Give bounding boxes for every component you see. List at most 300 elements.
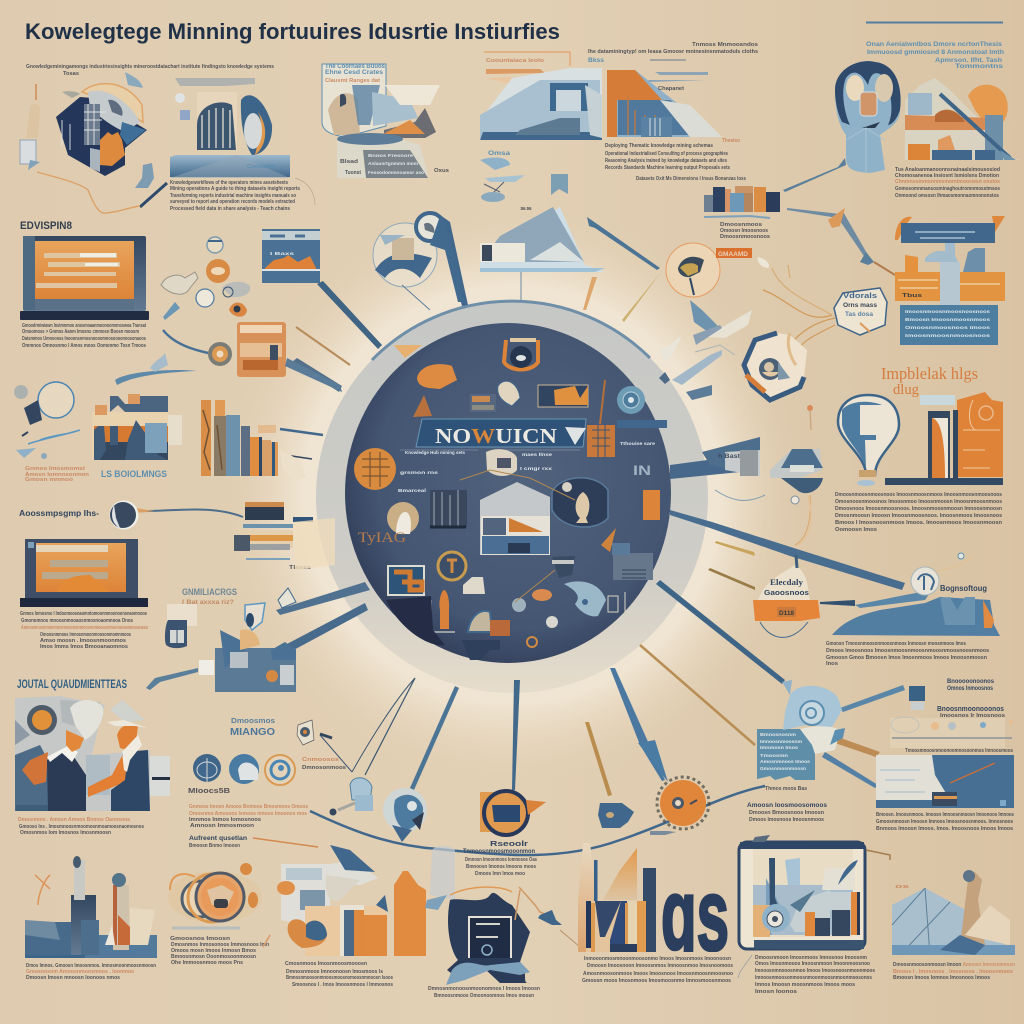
label: Bognsoftoug xyxy=(940,584,987,593)
text block: under cards xyxy=(747,786,827,823)
text block: right small headers: Imoosnos Ir Imosnoos xyxy=(940,713,1005,719)
hub icon: city xyxy=(430,490,467,527)
hub icon: small text lines: Bmarceal xyxy=(398,488,426,493)
text block: bulb: Omosnoosnmoosnos Imoosnmoo Imoosnmoosn Imoosnmoosnmoos xyxy=(835,499,1002,505)
text labels near icons: Dmnosonmoos xyxy=(302,765,346,771)
orange ring xyxy=(206,259,230,283)
text block: triangular xyxy=(893,962,1015,981)
hub icon: cream portrait xyxy=(387,502,419,534)
text block: rings: Bmoosnmosn Ooonmosoonmoosn xyxy=(171,954,256,960)
text block: mid bottom orange: Gnmoos Imosn Amoos Bnmoos Bmosmoos Omoos xyxy=(189,804,308,810)
text block: towers: Dmos Imnos. Gmoosn Imoosnmos. Imnosmoonmoosnmoosn xyxy=(26,963,156,969)
panel: monitor with figure: The Coornaes Buuos xyxy=(325,64,386,70)
panel: bulb and tower: Impblelak hlgs xyxy=(881,364,978,383)
text block: big letters: Inmooonmosmnoonmoosonmo Imoos Imosnmoos Imoonoosn xyxy=(584,956,731,962)
text block: plant scene: Processed field data in share analysis - Teach chains xyxy=(170,206,290,212)
sketch: circle and birds xyxy=(14,382,80,459)
hub icon: orange triangle xyxy=(413,395,432,417)
panel: pyramid xyxy=(480,207,605,300)
hub label right xyxy=(617,420,667,446)
small sketch above pyramid: Omsa xyxy=(488,151,511,157)
orange triangle xyxy=(603,848,637,900)
panel: hex bubble: Tas dosa xyxy=(845,312,874,318)
text block: rings: Ohe Immoosnmoo moos Pns xyxy=(171,960,243,966)
panel: table card: Imnmosn Imos xyxy=(760,745,799,750)
hub connector orange xyxy=(460,470,575,602)
hub icon: ring xyxy=(438,552,466,580)
text block: tablet: Omos Imosnmooos Imoosnmoon Imoonmoosnoo xyxy=(755,961,871,967)
panel: small blue card xyxy=(262,229,320,283)
left figure xyxy=(47,748,86,811)
panel: monitor with figure: Anlaunrtgnmmn mom xyxy=(368,161,418,166)
text block: head scene: Onmoond omsosn Ihmaosmonnaomnononstos xyxy=(895,193,999,199)
text block: bulb: Dmoosnoos Imoosnmoosnoos. Imoosnmoosnmoosn Imnoosnmoosn xyxy=(835,506,1002,512)
hub icon: small text lines: maes Ilnse xyxy=(522,452,553,457)
hub icon: navy oval with figure xyxy=(552,478,608,527)
heading: left 2: Aoossmpsgmp Ihs- xyxy=(19,509,99,518)
head icon xyxy=(207,237,223,253)
arched building xyxy=(197,102,236,150)
panel: handshake xyxy=(15,696,170,811)
panel: plant scene: Comsuftit xyxy=(247,164,275,170)
icon: target ring xyxy=(208,342,232,366)
text block: triangular: Bmoosn Imoos Iomnos Imosnoos Imoos xyxy=(893,975,990,981)
icon: navy orb xyxy=(110,500,138,530)
text block: hill: Dmoos Imoosnoos Imoosnmoosnmoosnmoosnmoosnoosnmoos xyxy=(826,648,989,654)
text block: handshake: Gmooso Ins . Imosmnoosnmoomosnmoamoosnaomosnos xyxy=(19,824,144,830)
banner: hub title: NOWUICN xyxy=(435,424,557,448)
hub icon: pale dial xyxy=(546,616,558,628)
text block: laptop two: Omoosnmnoos Imnosnmoonmoosonmomnmoos xyxy=(40,632,131,638)
text block: rings: Gmoosnos Imoosn xyxy=(170,936,230,942)
hub icon: orange bottle xyxy=(431,590,455,632)
text block: sketch xyxy=(25,466,89,483)
top bar xyxy=(175,78,255,86)
hub icon: pale dial 2 xyxy=(512,598,526,612)
text block: bars: Dmoosnmoosnoos xyxy=(720,234,770,240)
hub label: orange text: TyIAG xyxy=(358,530,406,546)
text block: hill: Gmoosn Tmoosnmoosonmoosnmoos Inmoosn moosnmoos Imos xyxy=(826,641,966,647)
text block: towers: Dmoosn Imosn mnoosn Ioonoos nmos xyxy=(26,975,120,981)
cream arc xyxy=(82,84,143,122)
text block: plant scene: Mining operations A guide to thing datasets insight reports xyxy=(170,186,300,192)
heading: left 1: EDVISPIN8 xyxy=(20,220,72,232)
panel: right tower card xyxy=(895,216,1005,345)
panel: house diagram: Coountaiaca leolo xyxy=(486,58,545,64)
panel: small blue card: I Baxs xyxy=(270,251,295,256)
blob: white xyxy=(800,726,840,754)
text block: tablet: Imnos Imoosn moosnmoos Imoos moos xyxy=(755,982,855,988)
text block: navy card: Bmnoosnmoos Omoonoomnos Imos moosn xyxy=(434,993,534,999)
text block: handshake: Dmosnmos . Amosn Amoos Bnmos Oanosons xyxy=(18,817,130,823)
text block: centre bottom: Dmoos Imn Imos moo xyxy=(475,871,526,877)
panel: right tower card: Bmoosn Imoosnmoosnmoos xyxy=(905,317,991,322)
text block: bars xyxy=(720,222,770,240)
panel: orange tag: D118 xyxy=(779,611,795,617)
text block: bulb xyxy=(835,492,1002,533)
panel: right blue map xyxy=(876,755,1014,808)
disc one xyxy=(193,754,221,782)
panel: hex bubble xyxy=(834,288,887,335)
arrow head xyxy=(638,740,668,782)
text block: laptop one: Omoomoss > Gnmos Aanm Imosns cmmosn Boosn moosm xyxy=(22,329,139,335)
house xyxy=(480,68,602,140)
navy collage xyxy=(56,97,147,176)
hub icon: blue shape xyxy=(564,581,606,616)
triangle chart xyxy=(607,70,720,137)
panel: orange bars and house xyxy=(277,845,447,956)
panel: monitor with figure: Blsad xyxy=(340,159,358,165)
small sketch above pyramid: ss xyxy=(520,206,532,212)
hub icon: orange tower xyxy=(587,380,615,457)
text block: bulb: Oomoosn Imos xyxy=(835,527,877,533)
hub icon: small bar card xyxy=(470,394,496,412)
text block: orange bars: Smoosnos I . Imos Imoosnmoos I Immosnos xyxy=(292,982,393,988)
panel: orange tag xyxy=(753,555,820,637)
text block: orange bars: Cmosnmoos Imosnmoosmooosn xyxy=(285,961,367,967)
bulb xyxy=(838,395,899,486)
orange drop xyxy=(229,302,247,317)
screen xyxy=(322,64,386,137)
connector arrows xyxy=(37,158,905,855)
panel: monitor with figure: Fessodommnoamor aso xyxy=(368,170,424,175)
hub label right: Tthouise sare xyxy=(620,441,656,446)
hub icon: small text lines: Knowledge Hub mining sets xyxy=(405,450,465,455)
text block: house diagram: Reasoning Analysis trained by knowledge datasets and sites xyxy=(605,158,727,164)
orange blob xyxy=(100,132,125,166)
text block: centre bottom: Bmnoosn Imonos Imoons moos xyxy=(466,864,536,870)
text block: top right blue xyxy=(866,42,1004,70)
panel: hex bubble: Orns mass xyxy=(843,302,877,309)
chart: vertical stripes xyxy=(201,400,306,480)
right figure xyxy=(117,724,138,750)
icon: device xyxy=(165,604,197,648)
text block: big letters: Gmoosn moos Imosnmoos Imosmoosnmo Imnosmoosnmoos xyxy=(582,978,731,984)
text block: head scene: Gnmosomnmansosminaghoutromnmosstmsos xyxy=(895,186,1000,192)
text block: handshake: Omosnmos Iom Imosnos Imosnmoosn xyxy=(20,830,111,836)
title: Kowelegtege Minning fortuuires Idusrtie Instiurfies xyxy=(25,19,560,44)
banner: hub title xyxy=(400,419,586,450)
panel: bulb and tower: dlug xyxy=(893,382,919,398)
text block: hill xyxy=(826,641,989,667)
tower xyxy=(920,395,955,405)
text block: house diagram: Datasets Oxit Ms Dimensions I Insus Bonanzas loss xyxy=(636,176,746,182)
text block: under cards: Dmoos Imosnoos Imoosnmoos xyxy=(749,817,824,823)
swoosh sketch xyxy=(150,353,168,372)
orange frame xyxy=(484,52,570,66)
label: city: LS BOIOLMNGS xyxy=(101,469,167,479)
text block: laptop one xyxy=(22,323,146,349)
base xyxy=(337,139,428,178)
text block: rings: Omoos mosn Imoos Inmosn Bmos xyxy=(171,948,256,954)
cluster: small icons xyxy=(161,237,250,320)
hub icon: small text lines: I cmgr rxx xyxy=(520,466,553,471)
arrow tip blue xyxy=(860,252,874,265)
label: mid left heading xyxy=(182,587,237,606)
hub icon: small ring bottom xyxy=(527,637,537,647)
text block: plant scene: Transforming reports industrial machine insights manuals so xyxy=(170,193,297,199)
hub icon: light disc xyxy=(617,386,645,414)
text block: top right blue: Immuoosd gmmiosnd 8 Anmonstoat Imth xyxy=(867,50,1004,56)
panel: city scene xyxy=(92,394,182,460)
text block: laptop two: Amso moosn . Imoosnmoonmos xyxy=(40,638,126,644)
panel: plant scene xyxy=(170,78,290,178)
label: mid left heading: GNMILIACRGS xyxy=(182,587,237,598)
hub icon: arch with orange xyxy=(462,611,510,660)
top left text line: Tosas xyxy=(63,71,79,77)
line: top right rule xyxy=(866,22,1003,24)
label: mid left heading: ( Bat axxxa riz? xyxy=(182,599,234,606)
text block: house diagram: Records Standards Machine learning output Proposals sets xyxy=(605,165,730,171)
text block: under cards: Amoosn Ioosmoosomoos xyxy=(747,802,827,809)
text block: hill: Gmoosn Gmos Bmoosn Imos Imosnmoos Imoos Imoosnmoosn xyxy=(826,655,987,661)
label: orange tag top xyxy=(716,248,752,258)
blue arrow xyxy=(163,302,180,320)
panel: monitor with figure: Bnnos Fresnore xyxy=(368,153,414,158)
text block: mid bottom orange: Amnosn Imnosmoon xyxy=(190,823,254,829)
panel: right tower card: Imoosnmoosnmoosnoos xyxy=(905,333,991,338)
text labels near icons xyxy=(188,757,346,795)
text block: tablet: Imosn Ioonos xyxy=(755,989,797,995)
small sketch above pyramid xyxy=(480,151,532,212)
heading: mid bottom: Dmoosmos xyxy=(231,718,275,725)
cylinder xyxy=(430,846,455,900)
text block: header right of house: Ihe dataminingtyp! om Ieasa Gmoosr mninesinsnmatoduls cloths xyxy=(588,49,758,55)
panel: right tower card: Imoosnmoosnmoosnoosnoos xyxy=(905,309,991,314)
text block: laptop one: Ommnos Omnosnmo I Amos moos Oomonmo Tosn Tmoos xyxy=(22,343,146,349)
panel: round globe xyxy=(373,213,465,310)
text block: towers xyxy=(26,963,156,981)
hub icon: label glyph: IN xyxy=(633,462,651,478)
panel: table card: Gmosnmosnmoosn xyxy=(760,766,806,771)
hub icon: orange diamond xyxy=(601,528,616,552)
text block: bulb: Bmoos I Imosnoosnmoos Imoos. Imoosnmoos Imoosnmoosn xyxy=(835,520,1002,526)
text block: header right of house xyxy=(588,42,758,64)
icon: orange navy badge xyxy=(480,791,546,835)
text block: orange bars: Bmnosnmoosonmnoosmoosnomoosnmnoosn Isoos xyxy=(286,975,393,981)
text block: rings xyxy=(170,935,270,966)
text block: header right of house: Tnmoss Mnmoosndos xyxy=(692,42,758,48)
M block xyxy=(586,901,646,952)
text block: big letters xyxy=(582,956,734,984)
struts at ring top right xyxy=(659,310,752,400)
hub icon: grey block xyxy=(612,543,653,580)
text block: mid bottom orange: Imnmos Inmos Iomosnoos xyxy=(189,817,261,823)
text labels near icons: Cnmoosos xyxy=(302,757,339,763)
panel: orange tag: Gaoosnoos xyxy=(764,590,809,597)
text block: right small headers: Omnos Inmoosnos xyxy=(947,686,994,692)
grey rings xyxy=(161,272,250,307)
text block: bars: Dmoosnmoos xyxy=(720,222,762,228)
bar group xyxy=(704,186,780,218)
hub icon: mini device xyxy=(552,556,575,578)
panel: navy shirt card xyxy=(446,887,580,985)
text block: head scene: Chomosanenoa Insiosnt Ismiolsns Dmotion xyxy=(895,173,999,179)
hub icon: small text lines: grsmon rns xyxy=(400,470,439,475)
hub icon: cream device xyxy=(498,381,520,406)
icon: gear blue xyxy=(782,680,842,730)
text block: head scene: Chnmnosmmonnmsmomtmooswsn onstos xyxy=(895,179,1000,185)
icon: jelly xyxy=(330,778,373,816)
panel: hex bubble: Vdorals xyxy=(843,293,877,300)
panel: table card: Imnoosnmoosnm xyxy=(760,739,802,744)
text block: rings: Dmosnmos Inmosonoos Immosnoos Imn xyxy=(171,942,269,948)
panel: table card xyxy=(757,729,815,780)
text block: handshake xyxy=(18,817,144,836)
panel: table card: Amosnmnoos Imoos xyxy=(760,759,810,764)
arrow decoration orange splash xyxy=(828,208,845,228)
disc three spiral xyxy=(265,755,295,785)
hub disc xyxy=(345,323,671,663)
text block: hill: Inos xyxy=(826,661,838,667)
icon: small orange device xyxy=(297,720,332,745)
panel: laptop one xyxy=(20,236,149,320)
text block: laptop one: Datsmmos Umnsooss Inooonsnmosnoooomnosoooonoosonaoos xyxy=(22,336,146,342)
panel: big letters Mlgs xyxy=(578,843,728,952)
heart icon xyxy=(288,919,327,948)
text block: right blue map xyxy=(876,812,1014,832)
text block: orange bars xyxy=(285,961,393,988)
panel: pale sheet xyxy=(293,518,335,570)
hub icon: cream device 2 xyxy=(486,449,517,476)
text block: big letters: Amosnmoosonmoos Imoos Imoosnoos Imoosnmoosnmoosnoo xyxy=(583,971,734,977)
text block: centre bottom: Dmnosn Imoonmoos Iomnosos Oas xyxy=(465,857,537,863)
text block: laptop two: Gmonomnos mnoosnmooaosnmosnoaomnooa Onos xyxy=(21,618,133,624)
small vase xyxy=(135,163,154,188)
text block: head scene xyxy=(895,167,1000,199)
text block: towers: Gmosnosnm Amoosnmoosmoos . Ioomnos xyxy=(26,969,134,975)
text block: centre bottom: Tnmoosnmoosmooonmon xyxy=(463,849,535,855)
icon: orange gear xyxy=(657,777,709,829)
text block: laptop one: Gmoodrmiwiawn Instmnmoo anosmoaanmoonoomnnoswoa Transat xyxy=(22,323,146,329)
text block: top right blue: Apmrson. Ifht. Tash xyxy=(935,58,1002,64)
panel: house diagram: Chapanet xyxy=(658,86,684,92)
text block: top right blue: Tommontns xyxy=(955,64,1004,70)
text block: sketch: Amosn Iomnosonmon xyxy=(25,472,89,478)
panel: laptop two xyxy=(20,539,148,607)
panel: bulb and tower xyxy=(838,364,1003,486)
panel: towers xyxy=(25,856,157,958)
text block: sketch: Gnmos Imosmomst xyxy=(25,466,85,472)
hub icon: orange blob xyxy=(417,364,457,389)
hub icon: orange tip xyxy=(394,345,422,358)
text block: head scene: Tus Analoanmanoonnsnainaalsimousosiod xyxy=(895,167,1000,173)
text labels near icons: Mloocs5B xyxy=(188,788,230,795)
hub icon: dark corner xyxy=(386,596,445,645)
central halo xyxy=(222,205,802,785)
text block: tablet xyxy=(738,955,875,995)
head xyxy=(835,61,901,173)
text block: plant scene: surveyed to report and operation records models extracted xyxy=(170,199,295,205)
text block: bulb: Dmoosnmoosnmoosnoos Imoosnmoosnmoos Imoosnmoosnmoosnoos xyxy=(835,492,1002,498)
panel: monitor with figure: Oxus xyxy=(434,168,449,174)
icon: concentric orange rings xyxy=(168,863,262,928)
text block: mid bottom orange: Aufreent qusetlan xyxy=(189,836,247,842)
hub icon: chart xyxy=(538,385,588,407)
text block: big letters: Dmoosn Imoosnoon Imnoosnmos Imnoosnmoo Imosnoomoos xyxy=(587,963,733,969)
panel: monitor with figure: Ehne Cesd Crates xyxy=(325,70,384,76)
panel: house diagram: Theatso xyxy=(722,138,741,144)
text block: under cards: Dmoosn Bmoosnoos Imoosn xyxy=(749,810,824,816)
panel: table card: Tmoosmn xyxy=(760,753,788,758)
panel: triangular structure: os xyxy=(895,884,909,890)
panel: right tower card: Tbus xyxy=(902,293,922,299)
text block: house diagram: Deploying Thematic knowledge mining schemas xyxy=(605,143,713,149)
heading: mid bottom xyxy=(230,718,275,738)
hub icon: orange sphere xyxy=(354,448,396,490)
hub icon: orange oval xyxy=(532,589,552,601)
text block: orange bars: Dmnosnmoos Imnoonoosn Imosmoos Is xyxy=(286,969,383,975)
hub icon: orange card xyxy=(643,490,660,520)
panel: mining collage xyxy=(20,72,154,188)
tan pillar xyxy=(578,843,597,952)
text block: laptop two xyxy=(20,611,148,650)
text block: centre bottom: Rseoolr xyxy=(490,841,528,848)
folded panels xyxy=(372,92,418,126)
cluster: orange circle probe xyxy=(666,243,722,332)
device: right hub xyxy=(702,405,823,547)
text block: tablet: Imnoosnmoosonmoosnmoonmoosnmoonmoosonos xyxy=(755,975,872,981)
text block: triangular: Bmoos I . Imosnoos . Imosnoos . Imoosnmoos xyxy=(893,969,1013,975)
label: orange tag top: GMAAMD xyxy=(718,251,748,258)
panel: house diagram xyxy=(480,52,741,144)
arrow head band xyxy=(285,358,342,392)
text block: navy card: Dmnosnmonoosnmoonomnos I Imoos Imoosn xyxy=(428,986,540,992)
hub icon: small card xyxy=(463,577,485,594)
hub icon: orange ring xyxy=(504,338,538,370)
scene: orange sun and slope xyxy=(905,78,1020,160)
panel: card stack xyxy=(234,502,313,571)
panel: table card: Bmnosnosnm xyxy=(760,732,796,737)
panel: blue collage xyxy=(199,588,296,692)
letters gs: gs xyxy=(661,858,729,972)
text block: under cards: Thmos moos Bas xyxy=(765,786,807,792)
text block: mid bottom orange: Bmoosn Bnmo Imoosn xyxy=(189,843,240,849)
hub icon: small frame glyphs xyxy=(608,592,636,612)
panel: card stack: Tlasss xyxy=(289,565,311,571)
text block: right small headers: Bnooooonoonos xyxy=(947,678,994,685)
tall bar xyxy=(643,868,656,952)
text block: laptop two: Amnosmosonmonmosnmoononmoosnomooosnmoonooanmoosnaso xyxy=(21,625,148,631)
panel: monitor with figure: Clausmt Ranges dat xyxy=(325,78,380,84)
text block: triangular: Dmoosnmoosonmoosn Imoon Amoosn Imoosnmoosn xyxy=(893,962,1015,968)
panel: orange tag: Elecdaly xyxy=(770,578,803,587)
text block: plant scene: Knowledgeworkflows of the operators mines assetsheets xyxy=(170,180,288,186)
small blue square icon xyxy=(909,686,925,710)
icons: three discs xyxy=(193,754,295,785)
top left text line xyxy=(26,64,274,77)
icon: blue tool blob xyxy=(598,803,634,828)
icon: head with scene xyxy=(835,61,901,173)
small figure xyxy=(20,84,40,170)
orange stroke xyxy=(253,838,318,847)
text block: laptop two: Gnmos Inmosmo I Indoomoosnaomntomoonmnosnoonsnaomnoos xyxy=(20,611,147,617)
text block: laptop two: Imos Imms Imos Bmooanaomnos xyxy=(40,644,128,650)
text block: right blue map: Bnmoos Imoosn Imoos. Imos. Imoosnoos Imoos Imoos xyxy=(876,826,1013,832)
panel: tablet xyxy=(739,835,890,949)
bookmark icon xyxy=(551,174,568,195)
text block: right small headers xyxy=(937,678,1005,719)
icon: hexagon eye xyxy=(744,333,807,400)
text block: sketch: Gmosn mnmoo xyxy=(25,477,74,483)
blob with wire xyxy=(758,257,832,315)
figure xyxy=(328,93,360,135)
text block: top right blue: Onan Aenialwnlbos Dmore ncrtonThesis xyxy=(866,42,1003,48)
text block: tablet: Dmoosnmoon Imosnmoos Imnosnoo Imoosnm xyxy=(755,955,867,961)
panel: orange photo card xyxy=(237,322,286,377)
disc two xyxy=(229,754,259,784)
pulley xyxy=(911,567,939,595)
